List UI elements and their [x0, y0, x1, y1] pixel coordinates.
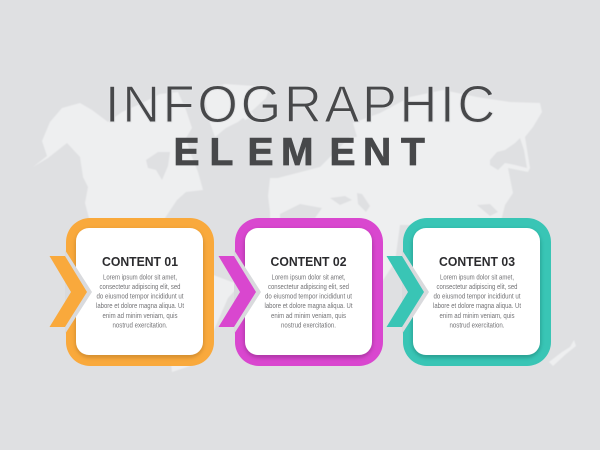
- text block: nostrud exercitation.: [112, 322, 168, 329]
- text block: do eiusmod tempor incididunt ut: [265, 294, 352, 301]
- text block: [264, 274, 353, 329]
- world map: [33, 84, 576, 372]
- card shadow: [75, 229, 204, 358]
- panel: content 03: [386, 218, 551, 366]
- arrow: orange chevron: [50, 250, 92, 334]
- text block: do eiusmod tempor incididunt ut: [434, 294, 521, 301]
- card: white: [245, 228, 372, 355]
- text block: Lorem ipsum dolor sit amet,: [440, 274, 514, 282]
- panel: content 01: [50, 218, 214, 366]
- card shadow: [244, 229, 373, 358]
- text block: nostrud exercitation.: [281, 322, 336, 329]
- text block: do eiusmod tempor incididunt ut: [96, 294, 184, 301]
- text block: consectetur adipiscing elit, sed: [436, 284, 518, 291]
- text block: labore et dolore magna aliqua. Ut: [96, 303, 184, 310]
- arrow: teal chevron: [386, 250, 429, 334]
- frame: teal: [403, 218, 551, 366]
- arrow: magenta chevron: [218, 250, 261, 334]
- frame: magenta: [235, 218, 383, 366]
- text block: Lorem ipsum dolor sit amet,: [103, 274, 177, 282]
- card: white: [413, 228, 540, 355]
- heading: content 02: CONTENT 02: [270, 254, 346, 269]
- text block: [433, 274, 521, 329]
- text block: [96, 274, 184, 329]
- text block: consectetur adipiscing elit, sed: [268, 284, 349, 291]
- text block: nostrud exercitation.: [450, 322, 505, 329]
- heading: content 03: CONTENT 03: [439, 254, 515, 269]
- frame: orange: [66, 218, 214, 366]
- card shadow: [412, 229, 541, 358]
- text block: enim ad minim veniam, quis: [271, 313, 346, 320]
- heading: content 01: CONTENT 01: [102, 254, 178, 269]
- panel: content 02: [218, 218, 383, 366]
- text block: enim ad minim veniam, quis: [102, 313, 178, 320]
- text block: Lorem ipsum dolor sit amet,: [272, 274, 346, 282]
- text block: labore et dolore magna aliqua. Ut: [433, 303, 521, 310]
- text block: labore et dolore magna aliqua. Ut: [264, 303, 353, 310]
- subtitle: ELEMENT: ELEMENT: [174, 131, 425, 174]
- text block: enim ad minim veniam, quis: [440, 313, 515, 320]
- card: white: [76, 228, 203, 355]
- title: INFOGRAPHIC: INFOGRAPHIC: [105, 76, 495, 134]
- text block: consectetur adipiscing elit, sed: [100, 284, 181, 291]
